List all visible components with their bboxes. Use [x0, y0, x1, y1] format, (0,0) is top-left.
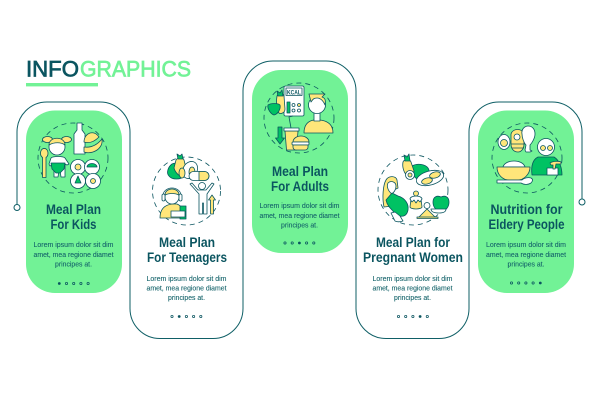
- icon: pregnant woman with foods: [378, 154, 449, 225]
- body text: principes at.: [508, 260, 544, 268]
- heading: [271, 164, 329, 194]
- heading: For Teenagers: [147, 250, 227, 265]
- panel: meal plan for pregnant women: [363, 154, 463, 318]
- heading: For Kids: [50, 217, 96, 232]
- body text: Lorem ipsum dolor sit dim: [260, 201, 340, 210]
- body text: [486, 240, 567, 268]
- icon: adult with calorie calculator: [264, 83, 334, 153]
- body text: [34, 240, 114, 268]
- heading: Meal Plan: [272, 164, 328, 179]
- body text: principes at.: [55, 260, 92, 268]
- heading: [488, 202, 565, 232]
- body text: principes at.: [281, 220, 318, 230]
- title: [26, 57, 191, 82]
- body text: amet, mea regione diamet: [260, 211, 340, 220]
- panel: nutrition for elderly people: [478, 110, 574, 293]
- icon: elderly person with foods: [492, 123, 562, 193]
- heading: Meal Plan: [159, 235, 215, 250]
- title underline: [26, 83, 98, 86]
- body text: [260, 201, 340, 230]
- pagination dots: [58, 282, 89, 285]
- pagination dots: [510, 282, 542, 284]
- panel: meal plan for adults: [252, 70, 348, 253]
- heading: [147, 235, 227, 265]
- heading: Nutrition for: [490, 202, 563, 217]
- title: INFO: [26, 57, 79, 82]
- body text: [372, 274, 453, 302]
- body text: principes at.: [394, 293, 431, 302]
- pagination dots: [171, 315, 202, 318]
- icon: child with foods: [38, 123, 108, 193]
- body text: amet, mea regione diamet: [372, 284, 453, 292]
- panel: meal plan for teenagers: [146, 154, 227, 318]
- heading: Meal Plan: [46, 202, 101, 217]
- heading: [363, 235, 463, 265]
- pagination dots: [284, 242, 315, 244]
- body text: amet, mea regione diamet: [146, 284, 227, 292]
- heading: Eldery People: [488, 217, 565, 232]
- body text: Lorem ipsum dolor sit dim: [146, 274, 226, 283]
- pagination dots: [397, 315, 428, 318]
- heading: For Adults: [271, 179, 329, 194]
- body text: Lorem ipsum dolor sit dim: [486, 240, 566, 249]
- body text: Lorem ipsum dolor sit dim: [34, 240, 114, 249]
- icon: adult with calorie calculator: KCAL: [287, 89, 301, 96]
- heading: [46, 202, 101, 232]
- heading: Pregnant Women: [363, 250, 463, 265]
- body text: [146, 274, 227, 302]
- heading: Meal Plan for: [376, 235, 451, 250]
- icon: teenager with foods: [152, 154, 220, 225]
- connecting outline: [14, 61, 585, 338]
- body text: amet, mea regione diamet: [34, 250, 114, 259]
- body text: amet, mea regione diamet: [486, 250, 567, 259]
- title: GRAPHICS: [80, 57, 191, 82]
- panel: meal plan for kids: [26, 110, 122, 293]
- body text: Lorem ipsum dolor sit dim: [372, 274, 452, 283]
- body text: principes at.: [168, 293, 205, 302]
